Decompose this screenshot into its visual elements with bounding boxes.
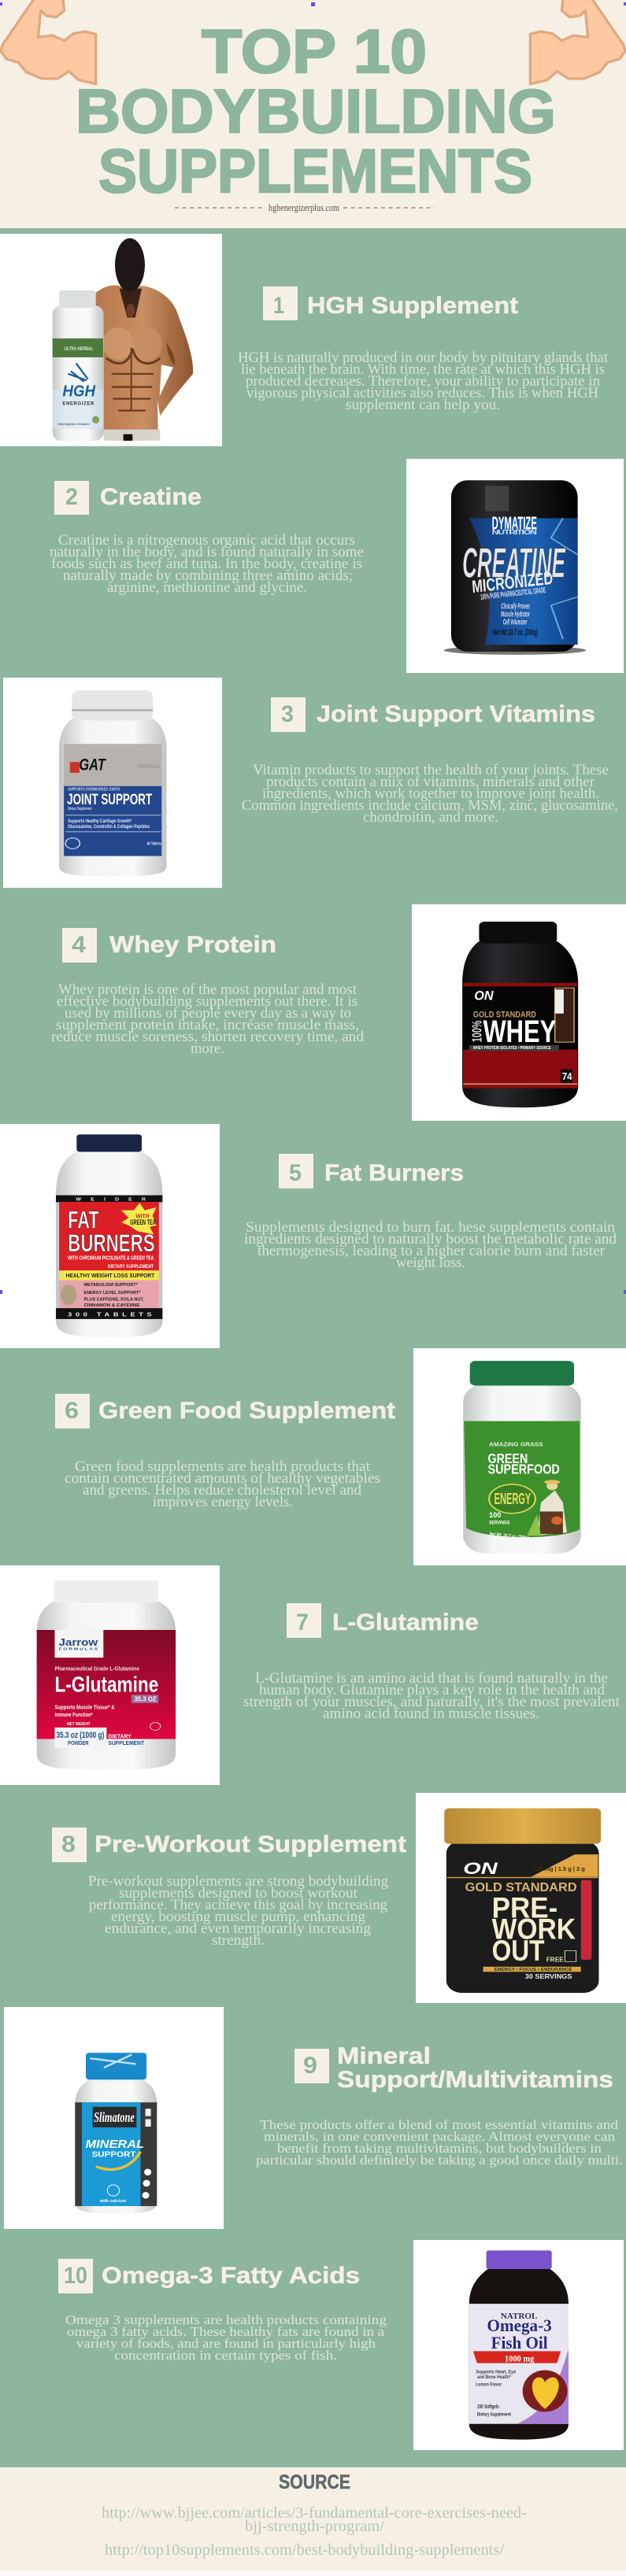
image: fat burners bottle: 300 TABLETS xyxy=(68,1312,152,1318)
image: creatine jar xyxy=(406,459,624,673)
number badge 2: 2 xyxy=(65,484,78,510)
body text 1: lie beneath the brain. With time, the rate at which this HGH is xyxy=(241,361,605,378)
image: HGH bottle and muscular man: ULTRA HERBAL xyxy=(65,346,93,352)
image: whey protein tub: GOLD STANDARD xyxy=(473,1009,536,1019)
body text 3: products contain a mix of vitamins, minerals and other xyxy=(266,774,595,790)
body text 9: These products offer a blend of most essential vitamins and xyxy=(260,2117,619,2132)
image: whey protein tub: ON xyxy=(474,989,494,1003)
image: HGH bottle and muscular man: HGH xyxy=(62,383,96,401)
image: fat burners bottle: WITH xyxy=(135,1213,150,1219)
image: joint support bottle: GAT xyxy=(79,756,106,774)
body text 4: effective bodybuilding supplements out there. It is xyxy=(57,993,357,1010)
image: fat burners bottle: CINNAMON & CAYENNE xyxy=(83,1303,140,1308)
image: omega-3 fish oil bottle: 150 Softgels xyxy=(477,2403,499,2410)
image: creatine jar: MICRONIZED xyxy=(469,567,555,597)
panel: 3 Joint Support Vitamins xyxy=(3,678,618,888)
number badge 1 xyxy=(263,286,298,320)
image: fat burners bottle: DIETARY SUPPLEMENT xyxy=(108,1264,154,1270)
body text 8: performance. They achieve this goal by increasing xyxy=(89,1897,387,1913)
image: omega-3 fish oil bottle xyxy=(413,2240,624,2450)
image: omega-3 fish oil bottle: Fish Oil xyxy=(491,2334,548,2352)
image: L-glutamine jar: NET WEIGHT xyxy=(67,1722,91,1727)
number badge 4: 4 xyxy=(72,932,86,958)
title: BODYBUILDING xyxy=(76,76,556,146)
body text 8: endurance, and even temporarily increasing xyxy=(105,1920,372,1937)
number badge 10: 10 xyxy=(64,2263,87,2289)
body text 7: amino acid found in muscle tissues. xyxy=(323,1706,539,1722)
body text 1: produced decreases. Therefore, your ability to participate in xyxy=(246,373,600,390)
image: mineral support bottle: with calcium xyxy=(99,2199,126,2204)
panel: 1 HGH Supplement xyxy=(0,234,609,446)
image: L-glutamine jar: SUPPLEMENT xyxy=(108,1739,144,1746)
icon: right flexed arm xyxy=(530,0,625,84)
body text 4 xyxy=(51,981,364,1057)
body text 5: ingredients designed to naturally boost the metabolic rate and xyxy=(244,1231,617,1247)
body text 9: benefit from taking multivitamins, but bodybuilders in xyxy=(277,2141,602,2156)
body text 1: vigorous physical activities also reduces. This is when HGH xyxy=(246,385,598,401)
image: pre-workout tub: 30 SERVINGS xyxy=(525,1973,572,1981)
image: pre-workout tub: FREE xyxy=(546,1957,564,1964)
image: creatine jar: Muscle Hydrator xyxy=(501,610,530,619)
image: L-glutamine jar: FORMULAS xyxy=(59,1647,98,1651)
panel: 4 Whey Protein xyxy=(51,904,626,1121)
image: pre-workout tub: WORK xyxy=(492,1913,576,1946)
image: pre-workout tub: ON xyxy=(463,1859,498,1878)
panel: 10 Omega-3 Fatty Acids xyxy=(58,2240,624,2450)
heading: Mineral Support/Multivitamins: Support/Multivitamins xyxy=(337,2067,613,2093)
number badge 9: 9 xyxy=(303,2053,317,2079)
heading: Mineral Support/Multivitamins: Mineral xyxy=(337,2043,431,2069)
image: mineral support bottle: MINERAL xyxy=(85,2138,144,2151)
icon: left flexed arm xyxy=(1,0,96,84)
panel: 2 Creatine xyxy=(50,459,624,673)
body text 5: thermogenesis, leading to a higher calorie burn and faster xyxy=(257,1243,606,1259)
panel: 6 Green Food Supplement xyxy=(55,1348,626,1565)
heading: Omega-3 Fatty Acids: Omega-3 Fatty Acids xyxy=(102,2263,360,2289)
image: pre-workout tub: ENERGY • FOCUS • ENDURANCE xyxy=(495,1968,572,1972)
body text 5: Supplements designed to burn fat. hese supplements contain xyxy=(246,1219,616,1236)
image: creatine jar: Cell Volumizer xyxy=(503,618,528,626)
source links: http://top10supplements.com/best-bodybuilding-supplements/ xyxy=(105,2541,504,2559)
body text 3 xyxy=(242,762,618,826)
number badge 5: 5 xyxy=(289,1160,302,1186)
image: pre-workout tub: PRE- xyxy=(492,1892,557,1924)
website credit: hghenergizerplus.com xyxy=(269,201,339,213)
body text 2: naturally in the body, and is found naturally in some xyxy=(50,544,364,560)
body text 2 xyxy=(50,532,364,596)
number badge 2 xyxy=(54,481,89,515)
body text 4: more. xyxy=(191,1040,224,1057)
title xyxy=(76,17,556,205)
body text 10: variety of foods, and are found in particularly high xyxy=(76,2336,376,2351)
image: fat burners bottle: WEIDER xyxy=(76,1197,146,1202)
number badge 3 xyxy=(271,697,306,732)
image: green superfood jar: SUPERFOOD xyxy=(488,1462,560,1477)
image: creatine jar: Net Wt 10.7 oz. (300g) xyxy=(493,627,538,637)
body text 3: chondroitin, and more. xyxy=(363,809,498,826)
number badge 9 xyxy=(294,2049,329,2083)
image: joint support bottle xyxy=(3,678,222,888)
image: omega-3 fish oil bottle: Supports Heart, Eye xyxy=(476,2369,516,2375)
number badge 7 xyxy=(287,1603,321,1638)
body text 7: L-Glutamine is an amino acid that is found naturally in the xyxy=(255,1670,608,1687)
image: green superfood jar: 100 xyxy=(489,1511,501,1520)
image: pre-workout tub xyxy=(416,1793,626,2003)
image: L-glutamine jar: Jarrow xyxy=(59,1637,98,1648)
body text 8: strength. xyxy=(212,1932,265,1949)
image: omega-3 fish oil bottle: 1000 mg xyxy=(505,2354,534,2363)
body text 8 xyxy=(88,1873,388,1949)
header panel xyxy=(0,0,626,228)
heading: Mineral Support/Multivitamins xyxy=(337,2043,613,2093)
body text 6: improves energy levels. xyxy=(153,1494,293,1510)
image: omega-3 fish oil bottle: Lemon Flavor xyxy=(476,2382,502,2387)
body text 9: particular should definitely be taking a good once daily multi. xyxy=(256,2153,623,2168)
image: L-glutamine jar: Pharmaceutical Grade L-Glutamine xyxy=(54,1666,139,1672)
number badge 7: 7 xyxy=(296,1610,309,1635)
image: fat burners bottle: FAT xyxy=(68,1207,99,1234)
source links xyxy=(102,2504,527,2559)
image: L-glutamine jar xyxy=(0,1565,220,1785)
image: whey protein tub: 100% xyxy=(470,1020,485,1042)
image: L-glutamine jar: 35.3 oz (1000 g) xyxy=(56,1731,104,1740)
heading: Fat Burners: Fat Burners xyxy=(324,1160,464,1186)
title: SUPPLEMENTS xyxy=(98,136,532,205)
number badge 6 xyxy=(55,1394,90,1428)
body text 9: minerals, in one convenient package. Almost everyone can xyxy=(264,2129,615,2144)
body text 4: supplement protein intake, increase muscle mass, xyxy=(56,1017,359,1033)
image: L-glutamine jar: DIETARY xyxy=(108,1733,131,1739)
body text 6: contain concentrated amounts of healthy vegetables xyxy=(65,1470,380,1487)
heading: Creatine: Creatine xyxy=(100,484,202,510)
image: green superfood jar: Net Wt. 24.7 oz. (700g) xyxy=(489,1531,530,1541)
heading: Whey Protein: Whey Protein xyxy=(109,932,276,958)
image: omega-3 fish oil bottle: Dietary Supplement xyxy=(477,2412,512,2417)
body text 6 xyxy=(65,1458,380,1510)
heading: HGH Supplement: HGH Supplement xyxy=(307,293,518,319)
image: green superfood jar: ENERGY xyxy=(495,1490,532,1507)
image: omega-3 fish oil bottle: and Bone Health* xyxy=(477,2375,511,2380)
image: HGH bottle and muscular man: Dietary Supplement - 60 Capsules xyxy=(57,422,90,426)
image: L-glutamine jar: Immune Function* xyxy=(54,1712,93,1718)
heading: source: SOURCE xyxy=(279,2471,350,2493)
image: omega-3 fish oil bottle: NATROL xyxy=(501,2312,537,2321)
image: mineral support bottle: Slimatone xyxy=(94,2109,135,2126)
body text 4: Whey protein is one of the most popular and most xyxy=(58,981,357,998)
body text 1: supplement can help you. xyxy=(346,397,500,413)
body text 1 xyxy=(238,349,609,413)
image: pre-workout tub: OUT xyxy=(492,1935,545,1967)
image: joint support bottle: 60 Tablets xyxy=(147,841,161,846)
body text 5 xyxy=(244,1219,617,1271)
heading: Green Food Supplement: Green Food Supplement xyxy=(98,1398,395,1424)
image: whey protein tub: 74 xyxy=(562,1071,572,1082)
title: TOP 10 xyxy=(202,17,427,86)
number badge 1: 1 xyxy=(273,293,284,319)
body text 7 xyxy=(243,1670,620,1722)
image: L-glutamine jar: Supports Muscle Tissue* & xyxy=(54,1705,115,1710)
source links: bjj-strength-program/ xyxy=(245,2518,384,2535)
image: joint support bottle: Supports Healthy Cartilage Growth* xyxy=(68,819,131,824)
body text 3: Vitamin products to support the health of your joints. These xyxy=(253,762,609,778)
source links: http://www.bjjee.com/articles/3-fundamental-core-exercises-need- xyxy=(102,2504,527,2522)
image: whey protein tub xyxy=(412,904,626,1121)
body text 1: HGH is naturally produced in our body by pituitary glands that xyxy=(238,349,609,366)
body text 2: Creatine is a nitrogenous organic acid that occurs xyxy=(58,532,355,549)
image: mineral support bottle: SUPPORT xyxy=(92,2151,136,2159)
image: mineral support bottle xyxy=(4,2007,224,2229)
image: joint support bottle: ESSENTIALS xyxy=(138,763,160,770)
panel: source xyxy=(0,2467,626,2576)
image: creatine jar: NUTRITION xyxy=(492,529,537,537)
body text 8: supplements designed to boost workout xyxy=(119,1885,358,1902)
body text 7: human body. Glutamine plays a key role in the health and xyxy=(259,1682,605,1698)
number badge 8: 8 xyxy=(61,1831,76,1857)
image: creatine jar: Clinically Proven xyxy=(501,602,530,611)
number badge 4 xyxy=(62,928,97,963)
body text 2: foods such as beef and tuna. In the body, creatine is xyxy=(51,556,362,572)
image: green superfood jar: GREEN xyxy=(488,1451,528,1467)
body text 4: used by millions of people every day as a way to xyxy=(65,1005,351,1022)
image: L-glutamine jar: POWDER xyxy=(68,1740,89,1746)
image: joint support bottle: Glucosamine, Condroitin & Collagen Peptides xyxy=(68,824,150,830)
panel: 9 Mineral Support/Multivitamins xyxy=(4,2007,623,2229)
image: pre-workout tub: GOLD STANDARD xyxy=(465,1880,577,1894)
image: joint support bottle: Dietary Supplement xyxy=(68,807,92,811)
image: HGH bottle and muscular man: ENERGIZER xyxy=(62,401,94,406)
body text 3: Common ingredients include calcium, MSM, zinc, glucosamine, xyxy=(242,797,618,814)
image: whey protein tub: WHEY PROTEIN ISOLATES • PRIMARY SOURCE xyxy=(473,1046,551,1051)
image: fat burners bottle xyxy=(0,1124,220,1348)
body text 8: Pre-workout supplements are strong bodybuilding xyxy=(88,1873,388,1890)
body text 6: Green food supplements are health products that xyxy=(75,1458,371,1475)
body text 3: ingredients, which work together to improve joint health. xyxy=(262,785,599,802)
image: L-glutamine jar: L-Glutamine xyxy=(54,1672,158,1696)
image: whey protein tub: WHEY xyxy=(483,1013,556,1049)
image: pre-workout tub: 175 mg | 1.5 g | 3 g xyxy=(533,1865,585,1872)
body text 5: weight loss. xyxy=(396,1255,465,1271)
body text 10: omega 3 fatty acids. These healthy fats are found in a xyxy=(67,2324,385,2339)
panel: 7 L-Glutamine xyxy=(0,1565,620,1785)
number badge 10 xyxy=(58,2259,93,2293)
heading: L-Glutamine: L-Glutamine xyxy=(332,1610,479,1635)
panel: 8 Pre-Workout Supplement xyxy=(52,1793,626,2003)
number badge 3: 3 xyxy=(281,701,294,727)
body text 10: concentration in certain types of fish. xyxy=(114,2348,337,2363)
image: HGH bottle and muscular man xyxy=(0,234,222,446)
image: fat burners bottle: ENERGY LEVEL SUPPORT* xyxy=(83,1291,141,1295)
image: fat burners bottle: METABOLISM SUPPORT* xyxy=(83,1283,138,1288)
image: L-glutamine jar: 35.3 OZ xyxy=(134,1696,157,1703)
body text 10: Omega 3 supplements are health products containing xyxy=(65,2312,387,2327)
image: fat burners bottle: WITH CHROMIUM PICOLINATE & GREEN TEA xyxy=(68,1255,154,1261)
image: joint support bottle: SUPPORTS OVERWORKED JOINTS xyxy=(68,787,120,792)
heading: Joint Support Vitamins: Joint Support Vitamins xyxy=(317,701,595,727)
image: omega-3 fish oil bottle: Omega-3 xyxy=(487,2316,552,2335)
image: creatine jar: DYMATIZE xyxy=(492,513,537,534)
body text 2: naturally made by combining three amino acids; xyxy=(63,567,353,584)
body text 7: strength of your muscles, and naturally, it's the most prevalent xyxy=(243,1694,620,1710)
body text 4: reduce muscle soreness, shorten recovery time, and xyxy=(51,1029,364,1045)
body text 10 xyxy=(65,2312,387,2363)
image: fat burners bottle: HEALTHY WEIGHT LOSS SUPPORT xyxy=(66,1272,155,1279)
image: fat burners bottle: BURNERS xyxy=(68,1229,155,1257)
heading: Pre-Workout Supplement: Pre-Workout Supplement xyxy=(94,1831,406,1857)
image: fat burners bottle: PLUS CAFFEINE, KOLA NUT, xyxy=(83,1297,144,1302)
body text 9 xyxy=(256,2117,623,2168)
panel: 5 Fat Burners xyxy=(0,1124,617,1348)
number badge 5 xyxy=(279,1154,313,1188)
body text 6: and greens. Helps reduce cholesterol level and xyxy=(83,1482,361,1499)
image: green superfood jar xyxy=(413,1348,626,1565)
image: fat burners bottle: GREEN TEA xyxy=(130,1218,156,1227)
image: joint support bottle: JOINT SUPPORT xyxy=(67,791,152,808)
image: green superfood jar: AMAZING GRASS xyxy=(489,1441,543,1447)
selection handles xyxy=(0,2,626,1294)
number badge 8 xyxy=(52,1828,87,1862)
body text 2: arginine, methionine and glycine. xyxy=(107,579,307,596)
body text 8: energy, boosting muscle pump, enhancing xyxy=(111,1909,365,1925)
number badge 6: 6 xyxy=(65,1398,79,1424)
image: green superfood jar: SERVINGS xyxy=(489,1520,510,1525)
